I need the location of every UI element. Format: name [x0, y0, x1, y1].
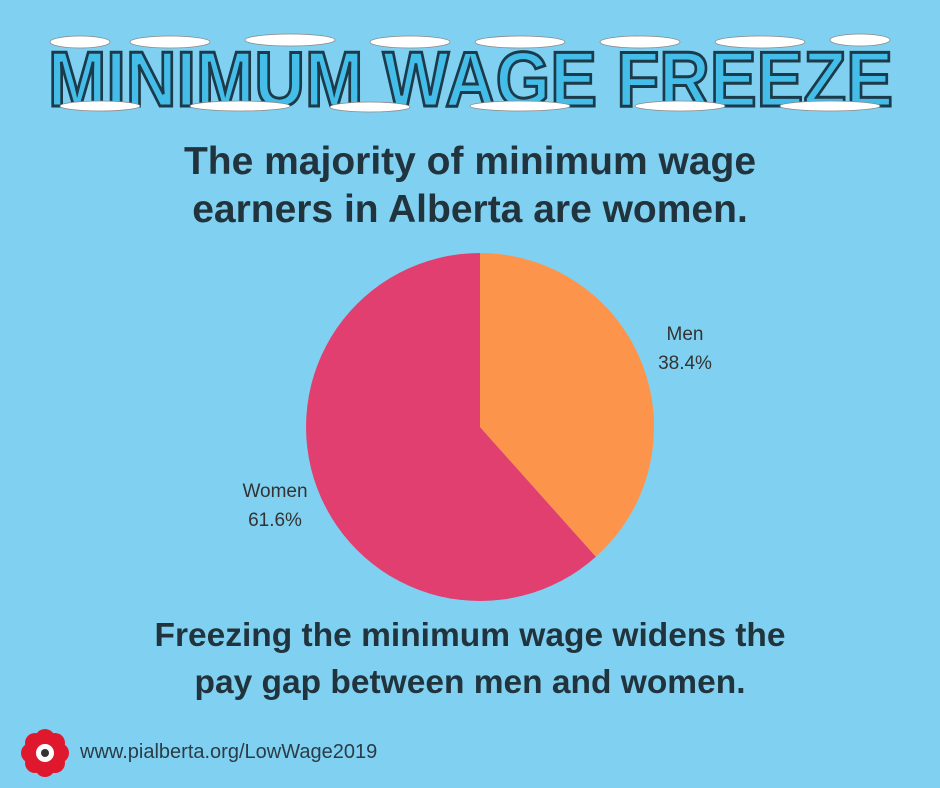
label: men: 38.4% — [658, 353, 712, 374]
label: women: 61.6% — [248, 510, 302, 531]
footer statement: Freezing the minimum wage widens the — [154, 617, 786, 654]
footer statement — [154, 617, 786, 701]
label: women: Women — [242, 481, 308, 502]
heading — [184, 140, 756, 231]
heading: earners in Alberta are women. — [192, 188, 748, 231]
heading: The majority of minimum wage — [184, 140, 756, 183]
icon: flower logo — [21, 729, 69, 777]
footer statement: pay gap between men and women. — [194, 664, 746, 701]
label: men: Men — [667, 324, 703, 345]
slice: women — [306, 253, 596, 601]
logo footer — [21, 729, 377, 777]
url: www.pialberta.org/LowWage2019 — [80, 741, 377, 763]
slice: men — [480, 253, 654, 557]
